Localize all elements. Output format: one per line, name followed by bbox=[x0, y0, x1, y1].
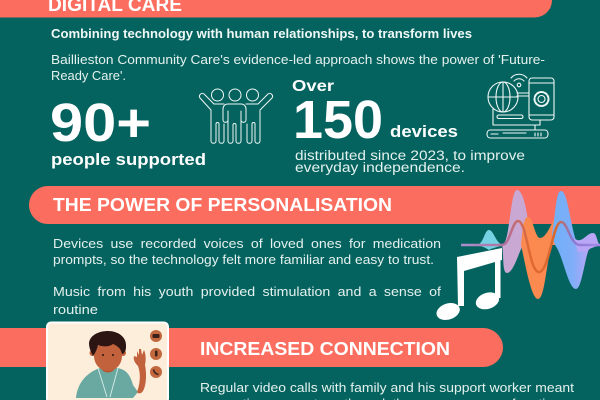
stat: devices: 150 bbox=[293, 90, 383, 150]
stat: devices: Over bbox=[292, 78, 334, 95]
personalisation text: Music from his youth provided stimulation and a sense of bbox=[53, 285, 442, 299]
intro text: Baillieston Community Care's evidence-led approach shows the power of 'Future- bbox=[51, 53, 545, 67]
personalisation text: routine bbox=[53, 303, 98, 317]
stat: devices: everyday independence. bbox=[295, 160, 465, 175]
heading: increased connection bbox=[0, 328, 503, 367]
connection text bbox=[200, 381, 575, 400]
heading: the power of personalisation: THE POWER OF PERSONALISATION bbox=[53, 195, 392, 215]
stat: devices: distributed since 2023, to improve bbox=[295, 148, 525, 163]
call buttons bbox=[150, 330, 162, 378]
subheading: Combining technology with human relationships, to transform lives bbox=[51, 27, 472, 41]
heading: the power of personalisation bbox=[29, 186, 600, 224]
stat: devices: devices bbox=[390, 122, 458, 141]
heading: increased connection: INCREASED CONNECTION bbox=[200, 339, 450, 359]
connection text: Regular video calls with family and his support worker meant bbox=[200, 381, 575, 395]
person bbox=[76, 331, 146, 398]
stat: people supported: 90+ bbox=[50, 93, 151, 153]
intro text bbox=[51, 53, 545, 83]
personalisation text: Devices use recorded voices of loved ones for medication bbox=[53, 237, 441, 251]
icon: sound wave bbox=[461, 190, 600, 299]
intro text: Ready Care'. bbox=[51, 69, 126, 83]
icon: music notes bbox=[434, 248, 502, 323]
stat: people supported bbox=[50, 93, 206, 169]
heading: digital care bbox=[0, 0, 552, 18]
personalisation text bbox=[53, 237, 442, 317]
video call illustration bbox=[47, 322, 168, 400]
stat: people supported: people supported bbox=[51, 150, 206, 169]
icon: group of people bbox=[199, 89, 273, 143]
personalisation text: prompts, so the technology felt more familiar and easy to trust. bbox=[53, 253, 434, 267]
stat: devices bbox=[292, 78, 525, 175]
icon: devices and network bbox=[487, 74, 554, 138]
